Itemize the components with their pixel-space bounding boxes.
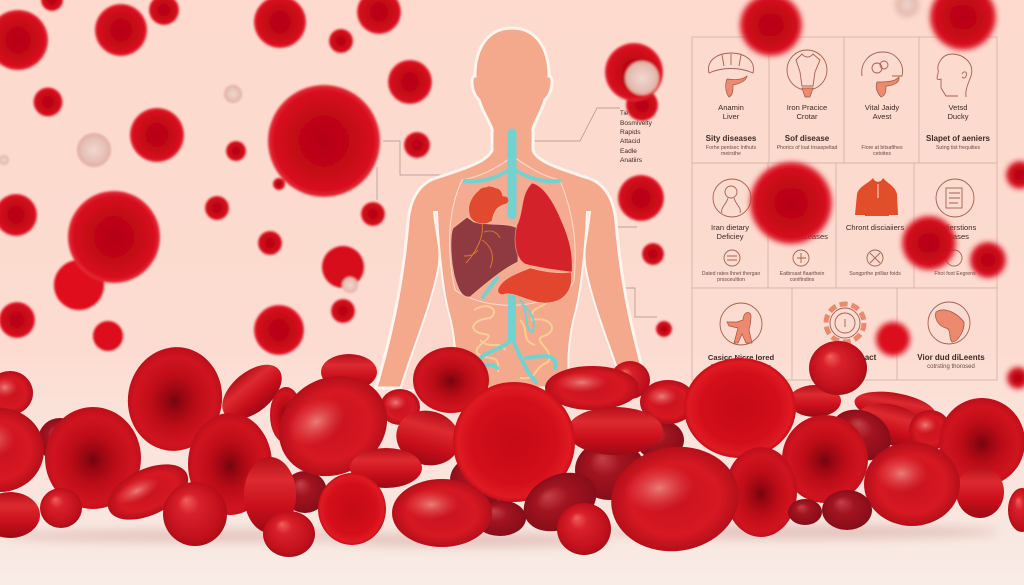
icon: figure in circle xyxy=(720,303,762,345)
icon: gear xyxy=(826,304,864,342)
icon: head profile xyxy=(937,54,972,97)
label: cell 1: Forhe pentsec Inthuts xyxy=(706,145,756,151)
label: cell 4: diases xyxy=(947,232,969,241)
label: cell 3: Chront disciaiiers xyxy=(846,223,904,232)
label: cell 1: Anamin xyxy=(718,103,744,112)
label: cell 2: Eatbrsast flaarthein xyxy=(780,271,824,277)
icon: liver dome xyxy=(709,53,753,97)
intestines xyxy=(473,300,552,378)
label: cell 4: Slapet of aeniers xyxy=(926,134,991,143)
liver veins xyxy=(464,224,500,268)
label: cell 3: Vior dud diLeents xyxy=(917,353,985,362)
foreground blood cell pile xyxy=(0,340,1024,559)
background blood cells xyxy=(0,0,672,355)
back layer xyxy=(0,354,951,536)
label: cell 3: cetoites xyxy=(873,151,891,157)
icon: red shirt xyxy=(855,178,898,216)
small icons xyxy=(724,250,962,266)
label: cell 2: conifindins xyxy=(790,277,815,283)
callout text xyxy=(620,111,653,164)
label: cell 4 xyxy=(934,223,976,277)
label: cell 2: Yoxt sliret Chact xyxy=(814,353,877,362)
leader lines xyxy=(377,108,657,317)
floor shadow xyxy=(0,525,1000,547)
row 1 xyxy=(706,50,991,157)
callout text: Rapids xyxy=(620,129,641,136)
callout text: Eadle xyxy=(620,148,637,155)
label: cell 1 xyxy=(706,103,757,157)
label: cell 4: dierstions xyxy=(944,223,976,232)
label: cell 2: Iron Pracice xyxy=(787,103,827,112)
icon: throat xyxy=(787,50,827,97)
label: cell 1: Casicc Nicre lored xyxy=(708,353,774,362)
label: cell 4: Vetsd xyxy=(948,103,968,112)
label: cell 3: Avest xyxy=(873,112,892,121)
label: cell 2 xyxy=(777,103,838,151)
label: cell 4: Fhot foot Eegrens xyxy=(934,271,976,277)
label: cell 1 xyxy=(708,353,774,370)
overlay blurred blood cells xyxy=(740,0,1024,389)
heart xyxy=(469,186,509,224)
grid lines xyxy=(692,37,997,380)
label: cell 1: Liver xyxy=(723,112,740,121)
icon: hand in circle xyxy=(928,302,970,344)
lung outline xyxy=(450,156,575,305)
label: cell 1: Dutne rates lhnet ingtheys xyxy=(711,364,772,370)
label: cell 3: Sungprthe prilliar foids xyxy=(849,271,901,277)
body silhouette xyxy=(376,28,648,388)
label: cell 1: Iran dietary xyxy=(711,223,749,232)
row 2 xyxy=(702,178,976,283)
callout text: Bosmivelty xyxy=(620,120,653,127)
stomach xyxy=(498,268,572,303)
lung red xyxy=(515,183,572,272)
callout text: Tie xyxy=(620,111,629,117)
front layer xyxy=(0,340,1024,559)
row 3 xyxy=(708,302,985,370)
label: cell 4: Ducky xyxy=(947,112,969,121)
label: cell 2: Crotar xyxy=(796,112,818,121)
liver xyxy=(451,217,518,297)
label: cell 1: Sity diseases xyxy=(706,134,757,143)
label: cell 3 xyxy=(917,353,985,370)
label: cell 3 xyxy=(846,223,904,277)
body diagram xyxy=(376,28,648,390)
callout text: Attacid xyxy=(620,138,640,145)
label: cell 4 xyxy=(926,103,991,151)
icon: person in circle xyxy=(713,179,751,217)
icon: document in circle xyxy=(936,179,974,217)
label: cell 3: cotrsting thorosed xyxy=(927,364,975,370)
callout text: Anatiirs xyxy=(620,157,643,164)
label: cell 2: Phorics of loat Insaspeltad xyxy=(777,145,838,151)
label: cell 1: Dated rates lhnet thergan xyxy=(702,271,760,277)
label: cell 3 xyxy=(861,103,903,157)
arm gap right xyxy=(568,212,624,390)
panel: conditions grid xyxy=(692,37,997,380)
label: cell 1: meirsthe xyxy=(721,151,741,157)
blood vessels xyxy=(465,133,559,382)
label: cell 1 xyxy=(702,223,760,283)
arm gap left xyxy=(400,212,456,390)
label: cell 2 xyxy=(780,232,828,283)
label: cell 1: Deficiey xyxy=(716,232,744,241)
icon: stomach dome xyxy=(862,52,903,97)
label: cell 3: Vital Jaidy xyxy=(865,103,899,112)
label: cell 4: Sutng tist frequities xyxy=(936,145,980,151)
label: cell 2: diseases xyxy=(798,232,828,241)
label: cell 2: Sof disease xyxy=(785,134,830,143)
label: cell 3: Fiore at bitsafthes xyxy=(861,145,903,151)
label: cell 1: prssceultion xyxy=(717,277,745,283)
